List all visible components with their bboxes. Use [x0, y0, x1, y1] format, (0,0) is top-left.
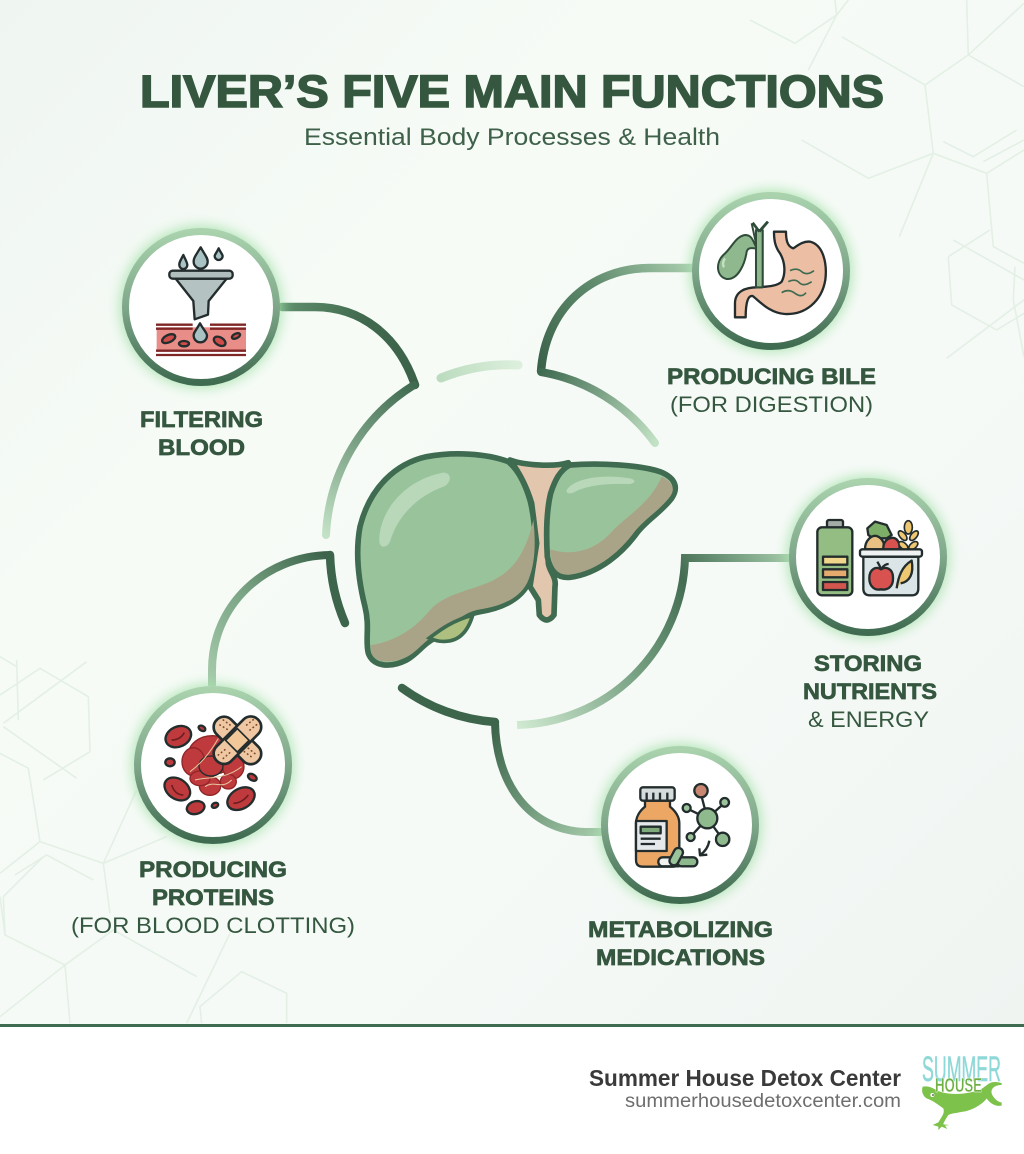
node: producing bile — [691, 191, 851, 351]
footer — [0, 1024, 1024, 1154]
icon: blood clot and bandage — [160, 712, 265, 816]
liver illustration — [358, 454, 675, 665]
node: filtering blood — [121, 227, 281, 387]
arrow: producing bile connector — [541, 268, 692, 372]
arrow: producing proteins connector — [212, 555, 330, 686]
label: producing bile — [667, 364, 876, 417]
label: storing nutrients: STORING — [814, 651, 922, 676]
connector arcs around liver — [212, 268, 790, 832]
label: producing bile: PRODUCING BILE — [667, 364, 876, 389]
arc: bottom — [402, 688, 495, 722]
liver left lobe — [358, 454, 535, 665]
label: storing nutrients: NUTRIENTS — [803, 679, 937, 704]
label: metabolizing medications: METABOLIZING — [588, 917, 773, 942]
label: filtering blood: BLOOD — [158, 435, 245, 460]
icon: pill bottle and molecule — [636, 784, 729, 867]
label: filtering blood: FILTERING — [140, 407, 263, 432]
ring: storing nutrients — [788, 477, 948, 637]
label: filtering blood — [140, 407, 263, 460]
subtitle: Essential Body Processes & Health — [304, 124, 720, 151]
footer band — [0, 1024, 1024, 1154]
arc: top short — [441, 365, 518, 378]
label: metabolizing medications: MEDICATIONS — [596, 945, 765, 970]
liver right lobe shadow — [550, 477, 673, 575]
liver right lobe highlight — [567, 477, 634, 493]
ring: producing bile — [691, 191, 851, 351]
arrow: storing nutrients connector — [517, 558, 790, 725]
label: producing proteins: PROTEINS — [152, 885, 274, 910]
node: producing proteins — [133, 685, 293, 845]
icon: battery and food container — [817, 520, 922, 595]
liver left lobe shadow — [371, 520, 535, 662]
ring: metabolizing medications — [600, 745, 760, 905]
logo: summer house gecko — [922, 1050, 1002, 1130]
label: producing proteins: (FOR BLOOD CLOTTING) — [71, 913, 355, 938]
logo: summer house gecko: HOUSE — [935, 1075, 982, 1097]
ring: filtering blood — [121, 227, 281, 387]
title: LIVER’S FIVE MAIN FUNCTIONS — [140, 66, 884, 117]
liver left lobe highlight — [379, 473, 450, 547]
label: metabolizing medications — [588, 917, 773, 970]
label: producing bile: (FOR DIGESTION) — [670, 392, 873, 417]
icon: gallbladder and stomach — [718, 222, 826, 317]
gallbladder sliver — [429, 615, 473, 641]
liver center ligament — [510, 460, 568, 620]
label: producing proteins: PRODUCING — [139, 857, 287, 882]
node: storing nutrients — [788, 477, 948, 637]
label: storing nutrients — [803, 651, 937, 732]
arc: left upper — [326, 385, 414, 535]
arc: left lower — [330, 555, 345, 623]
footer url: summerhousedetoxcenter.com — [625, 1090, 901, 1112]
icon: funnel over blood vessel — [156, 247, 246, 355]
ring: producing proteins — [133, 685, 293, 845]
arrow: metabolizing medications connector — [495, 722, 603, 832]
label: storing nutrients: & ENERGY — [808, 707, 929, 732]
label: producing proteins — [71, 857, 355, 938]
node: metabolizing medications — [600, 745, 760, 905]
footer organization name: Summer House Detox Center — [589, 1065, 901, 1091]
arc: top right — [541, 372, 655, 443]
arrow: filtering blood connector — [282, 307, 415, 385]
liver right lobe — [547, 464, 675, 577]
